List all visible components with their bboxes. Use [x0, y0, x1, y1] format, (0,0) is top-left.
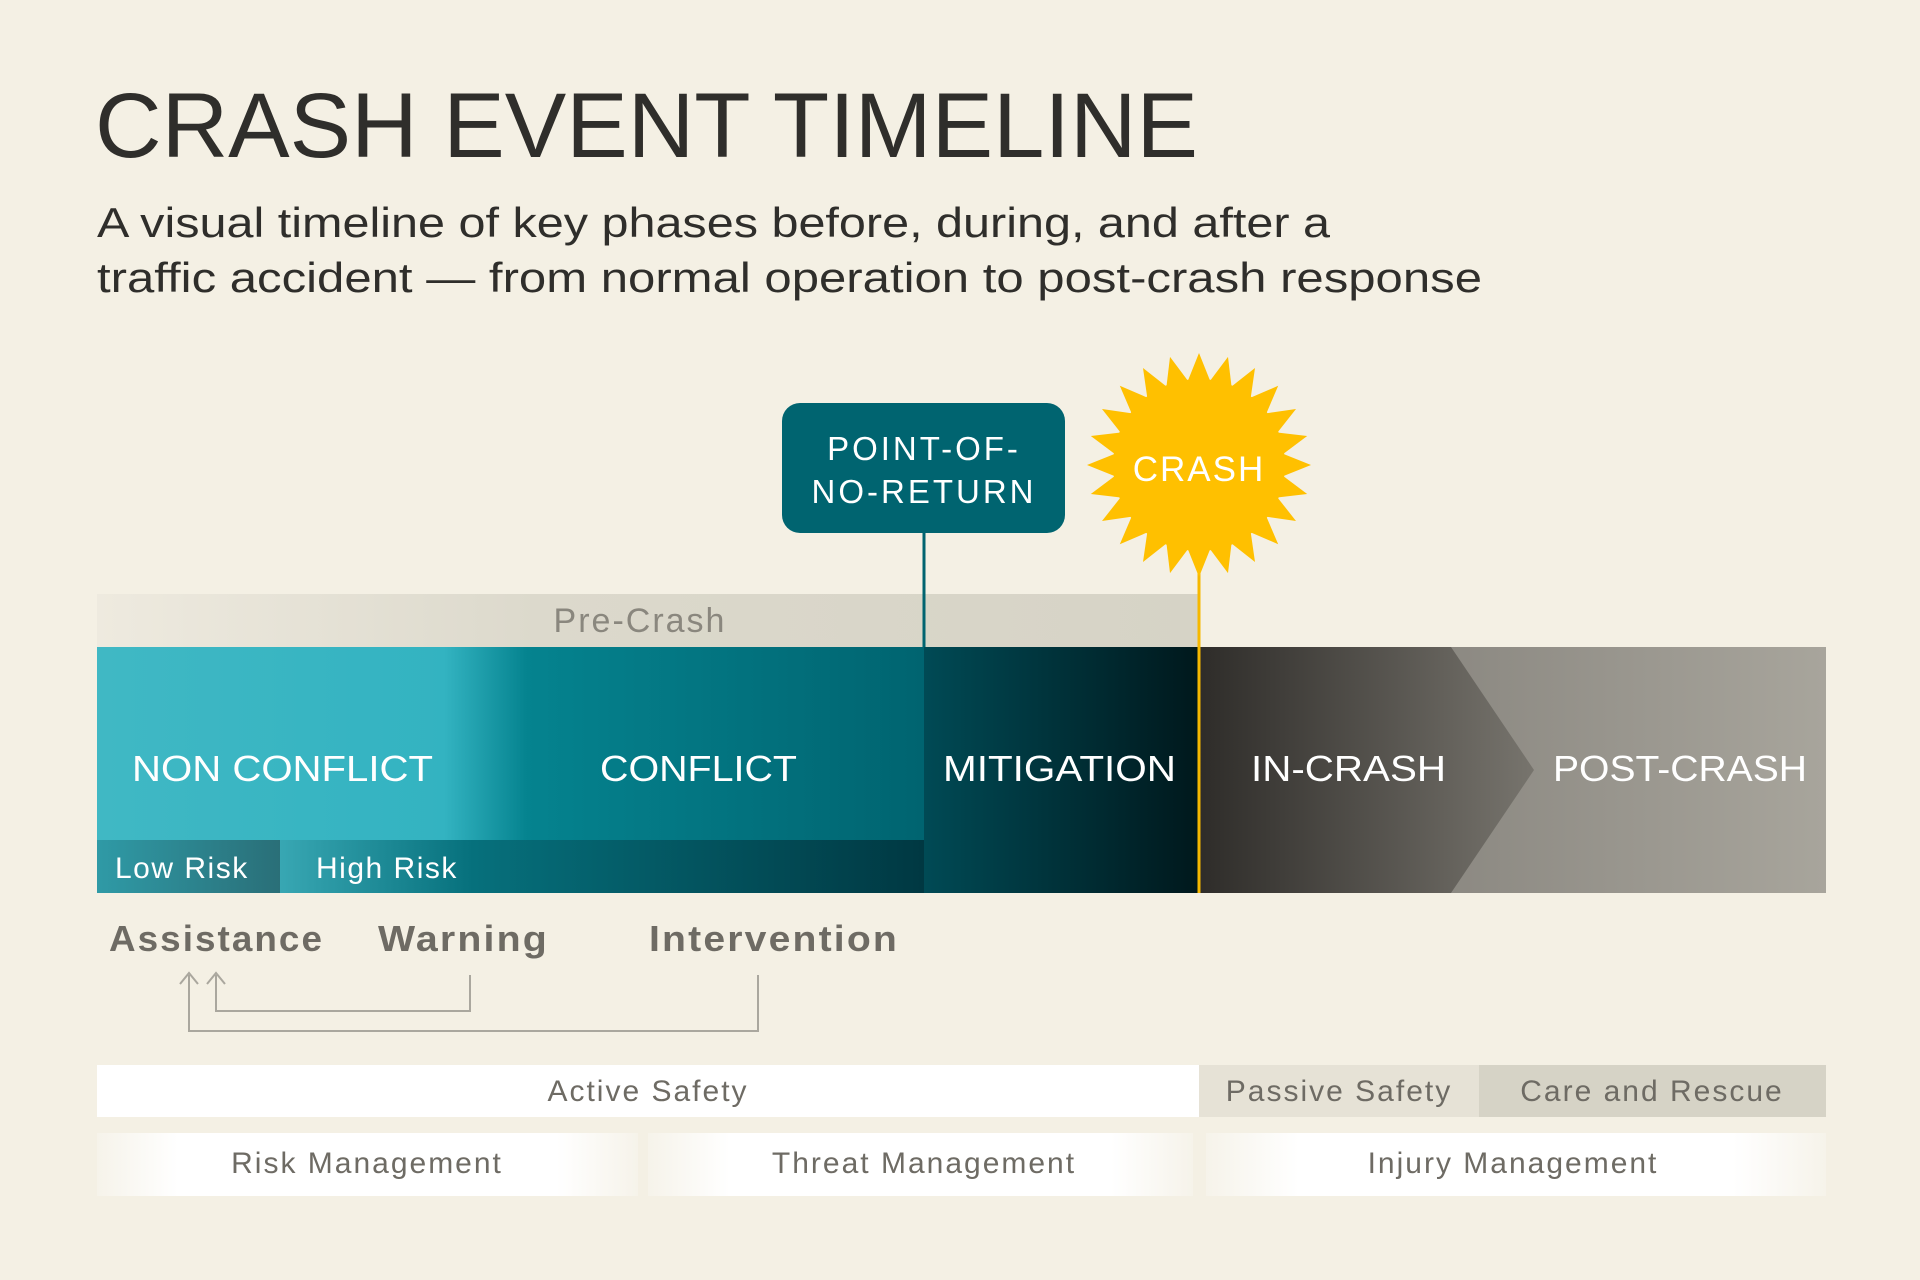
- band: pre-crash: Pre-Crash: [554, 602, 726, 640]
- box: threat management: [648, 1133, 1193, 1196]
- phase labels: POST-CRASH: [1553, 748, 1807, 789]
- phase labels: NON CONFLICT: [132, 748, 433, 789]
- marker: point-of-no-return: [782, 403, 1065, 647]
- labels: assistance / warning / intervention: Intervention: [649, 918, 899, 959]
- phase labels: MITIGATION: [943, 748, 1176, 789]
- timeline bar: [97, 647, 1826, 893]
- labels: assistance / warning / intervention: Assistance: [109, 918, 324, 959]
- marker: crash starburst: CRASH: [1133, 450, 1265, 489]
- box: care and rescue: [1479, 1065, 1826, 1117]
- phase labels: [132, 748, 1807, 789]
- segment: in-crash: [1199, 647, 1534, 893]
- segment: mitigation: [924, 647, 1199, 893]
- band: pre-crash: [97, 594, 1199, 647]
- segment: low risk: Low Risk: [115, 852, 249, 885]
- phase labels: CONFLICT: [600, 748, 797, 789]
- box: care and rescue: Care and Rescue: [1520, 1075, 1784, 1108]
- management row: [97, 1133, 1826, 1196]
- title: CRASH EVENT TIMELINE: [95, 75, 1198, 177]
- marker: point-of-no-return: POINT-OF-: [827, 430, 1021, 467]
- arrows: warning and intervention to assistance: [180, 973, 758, 1031]
- box: passive safety: Passive Safety: [1226, 1075, 1452, 1108]
- labels: assistance / warning / intervention: Warning: [378, 918, 549, 959]
- box: risk management: Risk Management: [231, 1147, 503, 1180]
- segment: low risk: [97, 840, 280, 893]
- subtitle: A visual timeline of key phases before, during, and after a: [97, 199, 1331, 246]
- segment: high risk: [280, 840, 924, 893]
- box: injury management: [1206, 1133, 1826, 1196]
- segment: non conflict / conflict: [97, 647, 924, 840]
- phase labels: IN-CRASH: [1251, 748, 1446, 789]
- box: active safety: Active Safety: [547, 1075, 749, 1108]
- marker: point-of-no-return: NO-RETURN: [812, 473, 1036, 510]
- segment: high risk: High Risk: [316, 852, 458, 885]
- safety row: [97, 1065, 1826, 1117]
- box: active safety: [97, 1065, 1199, 1117]
- subtitle: traffic accident — from normal operation to post-crash response: [97, 254, 1482, 301]
- box: risk management: [97, 1133, 638, 1196]
- subtitle: [97, 199, 1482, 301]
- box: passive safety: [1199, 1065, 1479, 1117]
- box: threat management: Threat Management: [772, 1147, 1076, 1180]
- segment: post-crash: [1451, 647, 1826, 893]
- marker: crash starburst: [1087, 353, 1311, 893]
- box: injury management: Injury Management: [1368, 1147, 1658, 1180]
- labels: assistance / warning / intervention: [109, 918, 899, 959]
